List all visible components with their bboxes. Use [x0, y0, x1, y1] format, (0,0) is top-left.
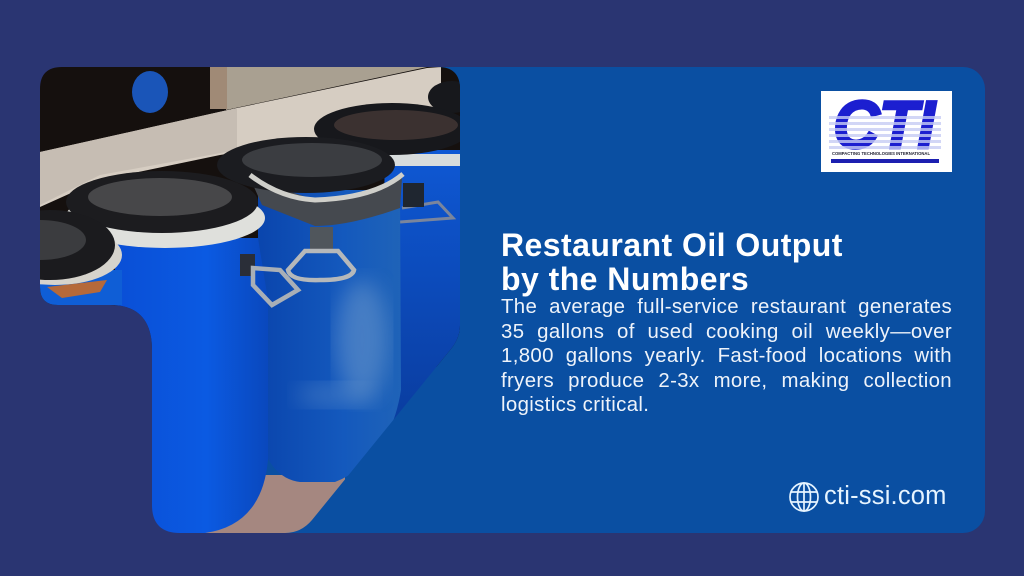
- logo bar: [831, 159, 939, 163]
- heading: [501, 227, 843, 297]
- ledge: [40, 67, 441, 207]
- photo: blue plastic barrels: [40, 67, 460, 533]
- far barrel: [428, 81, 460, 113]
- barrel left: [40, 270, 122, 305]
- logo tagline: COMPACTING TECHNOLOGIES INTERNATIONAL: [832, 151, 930, 156]
- icon: globe: [789, 482, 819, 512]
- body text: 35 gallons of used cooking oil weekly—over: [501, 320, 952, 342]
- background wall: [40, 67, 460, 367]
- body text: [501, 296, 952, 416]
- body text: 1,800 gallons yearly. Fast-food locations with: [501, 345, 952, 367]
- barrel 3: [380, 150, 460, 430]
- barrel 1: [115, 238, 268, 533]
- logo: CTI: [821, 91, 952, 172]
- heading: by the Numbers: [501, 261, 749, 297]
- logo stripes: [829, 113, 941, 149]
- body text: logistics critical.: [501, 394, 649, 416]
- floor: [205, 475, 345, 533]
- heading: Restaurant Oil Output: [501, 227, 843, 263]
- body text: The average full-service restaurant generates: [501, 296, 952, 318]
- barrel 2: [258, 190, 401, 482]
- website url: cti-ssi.com: [824, 482, 947, 510]
- body text: fryers produce 2-3x more, making collection: [501, 370, 952, 392]
- panel: blue content card: [240, 67, 985, 533]
